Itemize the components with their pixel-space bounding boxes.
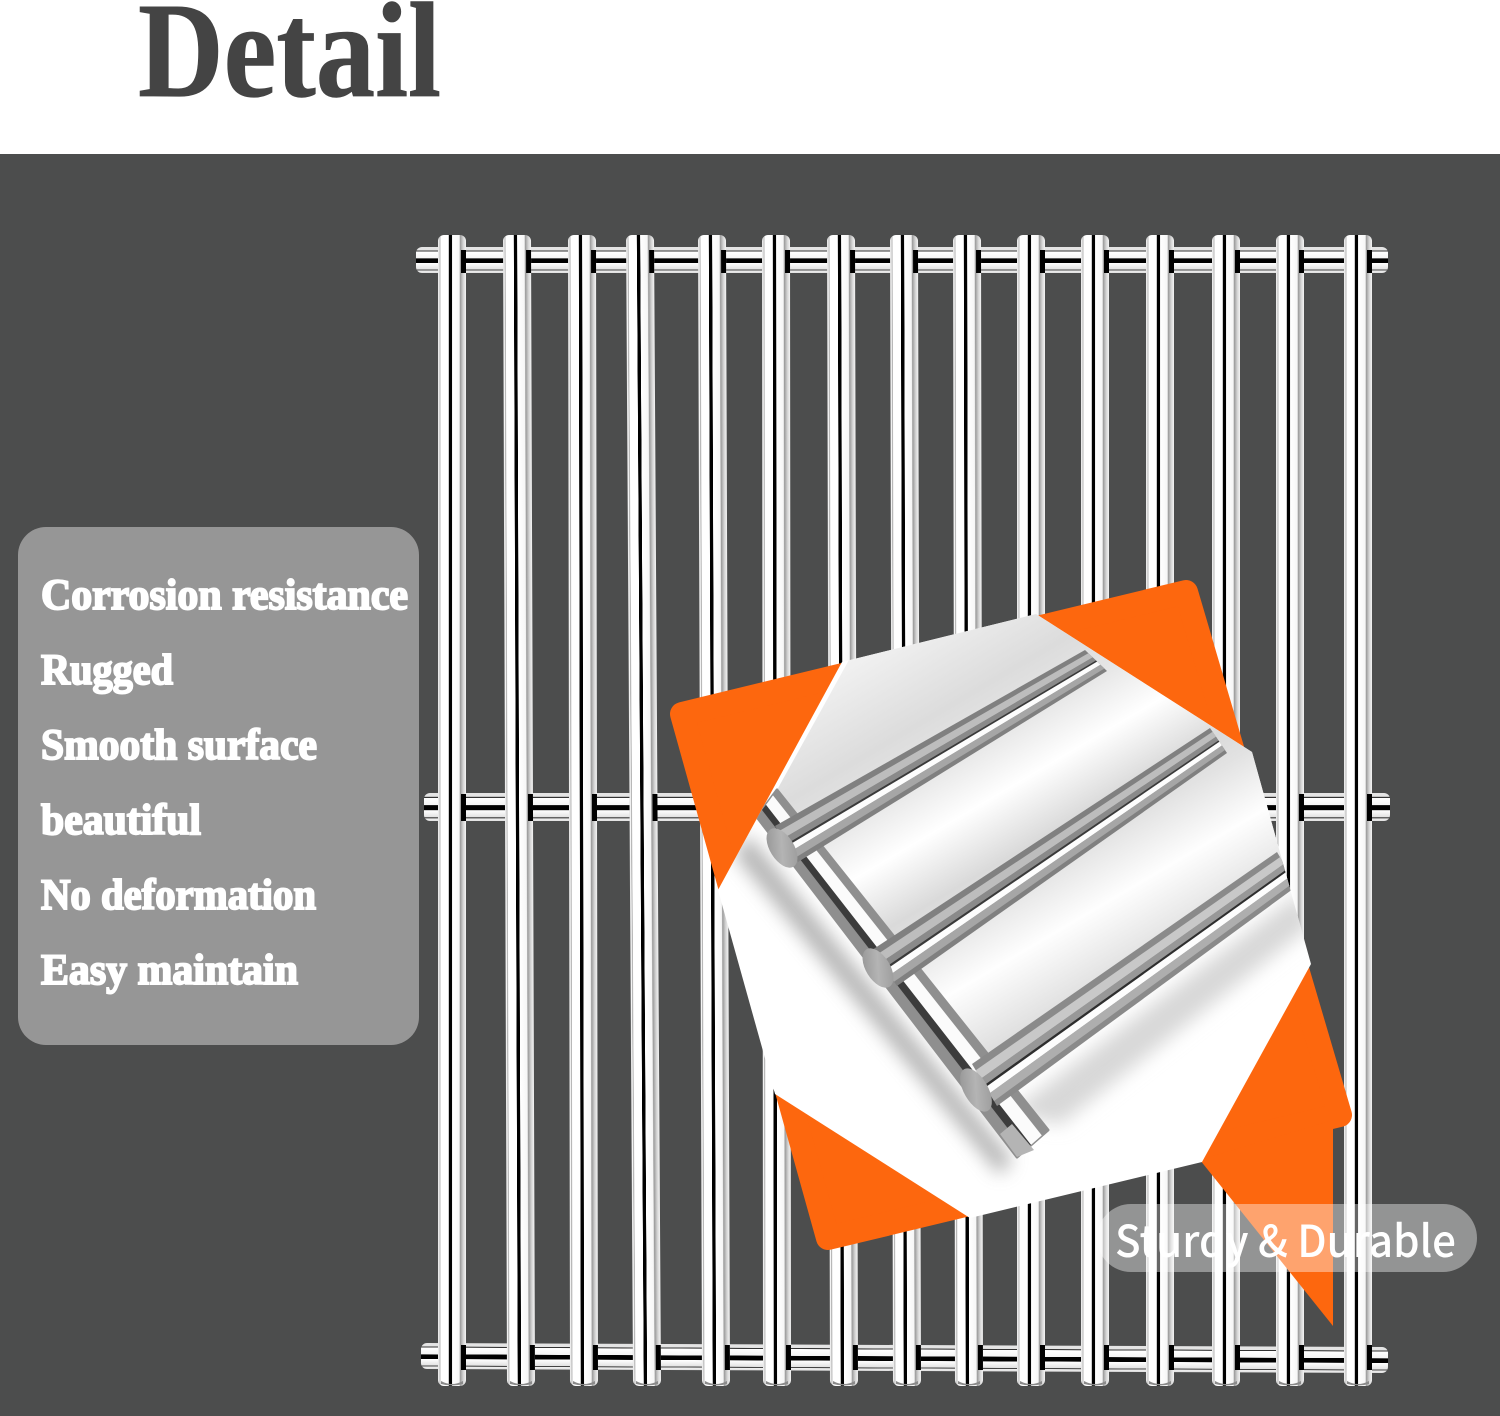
label text: Sturdy & Durable (1115, 1206, 1456, 1270)
orange pointer tail (1200, 1120, 1333, 1326)
vertical grate rods (438, 235, 1372, 1386)
feature list text: Smooth surface (41, 722, 317, 769)
callout: Sturdy & Durable label (1097, 1204, 1477, 1272)
panel background (18, 527, 419, 1045)
feature list text: Easy maintain (41, 947, 298, 994)
orange tilted card (682, 592, 1340, 1238)
top cross bar (416, 247, 1388, 273)
callout: close-up detail card (682, 592, 1340, 1326)
close-up photo (718, 614, 1311, 1218)
panel: feature list (18, 527, 419, 1045)
feature list text: No deformation (41, 872, 316, 919)
close-up cross bar (757, 790, 1048, 1157)
soft shadow under rack (735, 835, 1012, 1175)
feature list text: Rugged (41, 647, 173, 694)
bottom cross bar (421, 1343, 1388, 1373)
feature list text: Corrosion resistance (41, 572, 408, 619)
middle cross bar (424, 793, 1390, 821)
close-up rod 1 (760, 650, 1107, 873)
label pill (1097, 1204, 1477, 1272)
soft shadow under lower rod (1010, 892, 1312, 1125)
photo surface shading (778, 614, 1290, 1052)
close-up rod 2 (856, 728, 1227, 993)
feature list text (41, 572, 408, 994)
feature list text: beautiful (41, 797, 201, 844)
photo white backdrop (718, 615, 1311, 1218)
product photo: stainless steel grill grate (416, 235, 1390, 1386)
close-up rod 3 (954, 852, 1297, 1117)
